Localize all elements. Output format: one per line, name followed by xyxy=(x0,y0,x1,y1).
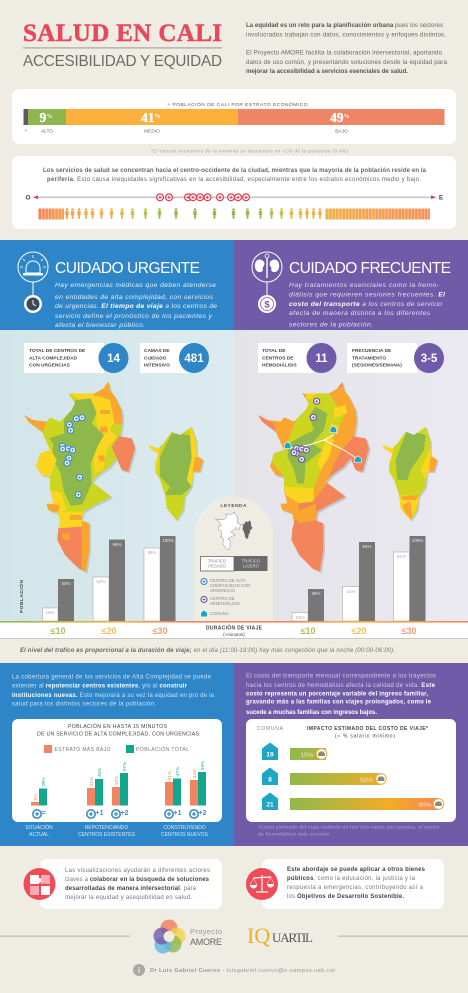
panel: population by economic stratum xyxy=(12,89,456,144)
panel text: Los servicios de salud se concentran hacia el centro-occidente de la ciudad, mientras que la mayoría de la población reside en la xyxy=(43,168,427,174)
cost chart title: (≈ % salario mínimo) xyxy=(335,734,395,740)
scenario icons: +1 xyxy=(96,810,104,817)
duration labels: ≤20 xyxy=(102,626,116,636)
bar chart: frequent care xyxy=(292,536,426,621)
comuna houses: 8 xyxy=(268,776,272,784)
stat: intensive care beds xyxy=(140,343,209,373)
logo: IQuartil: IQ xyxy=(247,923,270,948)
heading: CUIDADO URGENTE xyxy=(55,260,200,277)
legend items xyxy=(201,578,250,617)
logo: Proyecto AMORE xyxy=(154,920,222,954)
icon: puzzle xyxy=(24,868,56,900)
chart values: 32% xyxy=(114,776,119,785)
description: diálisis que requieren sesiones frecuentes. El xyxy=(289,292,445,298)
stat: treatment frequency: (SESIONES/SEMANA) xyxy=(352,362,402,368)
duration labels: ≤30 xyxy=(402,626,416,636)
scenario icons: +2 xyxy=(120,810,129,817)
cost bars: 90% xyxy=(418,802,432,809)
chart title: POBLACIÓN EN HASTA 15 MINUTOS xyxy=(68,723,168,730)
axis west to east with service markers: E xyxy=(439,194,444,202)
comuna houses: 21 xyxy=(266,802,274,808)
bar chart: urgent care xyxy=(42,536,176,621)
map: urgent care heavy traffic xyxy=(20,380,137,573)
author contact xyxy=(133,964,335,976)
stat: urgent care centres: TOTAL DE CENTROS DE xyxy=(29,348,86,354)
bar chart: urgent care: 100% xyxy=(162,538,174,543)
bar chart: frequent care: 10% xyxy=(295,615,305,620)
legend traffic key: LIGERO xyxy=(243,564,260,568)
duration labels xyxy=(51,626,416,636)
stat: intensive care beds: INTENSIVO xyxy=(144,362,170,368)
panel: frequent care map background xyxy=(234,330,468,622)
bar chart: frequent care: 41% xyxy=(346,589,356,594)
coverage text: extender al repotenciar centros existentes, y/o al construir xyxy=(12,684,188,690)
description: afecta de manera distinta a los diferentes xyxy=(289,310,431,317)
stat: intensive care beds: CUIDADO xyxy=(144,356,167,362)
transport text: sucede a muchas familias con ingresos bajos. xyxy=(246,710,377,716)
chart values: 6% xyxy=(33,793,38,800)
panel: east-west distribution xyxy=(12,156,456,229)
stat: urgent care centres xyxy=(24,343,128,373)
bar chart: frequent care: 100% xyxy=(412,538,423,543)
icon: kidneys and money xyxy=(252,252,282,313)
stat: urgent care centres: ALTA COMPLEJIDAD xyxy=(29,356,78,362)
stacked bar: % xyxy=(46,114,52,120)
duration labels: ≤20 xyxy=(352,626,366,636)
legend items: HEMODIÁLISIS xyxy=(210,601,240,606)
card text xyxy=(65,868,210,901)
chart title xyxy=(37,723,200,738)
transport text xyxy=(246,674,436,716)
legend traffic key xyxy=(200,556,268,571)
description: Hay tratamientos esenciales como la hemo- xyxy=(289,282,440,289)
duration labels: ≤30 xyxy=(153,626,167,636)
stat: treatment frequency: 3-5 xyxy=(421,353,438,365)
legend items: URGENCIAS xyxy=(210,588,235,593)
traffic note: El nivel del trafico es proporcional a la duración de viaje; en el día (11:00-19:00) hay más congestión que la noche (00:00-06:00). xyxy=(20,648,395,654)
card text: Las visualizaciones ayudarán a diferentes actores xyxy=(65,868,210,874)
card text: desarrolladas de manera intersectorial, para xyxy=(65,886,197,892)
logo: Proyecto AMORE: Proyecto xyxy=(190,927,222,936)
cost chart title: IMPACTO ESTIMADO DEL COSTO DE VIAJE* xyxy=(307,726,428,732)
description xyxy=(55,282,217,329)
stacked bar: 9 xyxy=(40,110,46,125)
bar chart: urgent care: 16% xyxy=(45,610,55,615)
card text: claves a colaborar en la búsqueda de soluciones xyxy=(65,877,210,883)
scenario icons: +1 xyxy=(174,810,182,817)
scenario icons: +2 xyxy=(198,810,207,817)
axis label: population: POBLACIÓN xyxy=(17,579,25,613)
panel: urgent care map background xyxy=(0,330,234,622)
map: urgent care light traffic xyxy=(147,423,205,522)
intro text: El Proyecto AMORE facilita la colaboración intersectorial, aportando xyxy=(246,50,443,56)
axis west to east with service markers: O xyxy=(25,194,31,202)
chart values xyxy=(33,761,205,800)
chart values: 57% xyxy=(122,762,127,771)
title block: SALUD EN CALI xyxy=(23,20,222,47)
stat: hemodialysis centres: TOTAL DE xyxy=(262,348,286,354)
cost card xyxy=(246,719,456,822)
scenario labels: REPOTENCIANDO xyxy=(85,825,128,831)
chart card xyxy=(12,719,222,822)
stat: urgent care centres: 14 xyxy=(107,353,120,365)
description: servicio define el pronóstico de los pacientes y xyxy=(55,313,213,320)
cost chart title xyxy=(307,726,428,740)
stat: hemodialysis centres: 11 xyxy=(315,353,328,365)
chart bars xyxy=(31,780,198,806)
legend xyxy=(194,496,273,622)
chart legend: POBLACIÓN TOTAL xyxy=(136,746,189,753)
title block xyxy=(23,20,222,70)
icon: scales xyxy=(246,868,278,900)
description: sectores de la población. xyxy=(289,322,373,328)
card text: los Objetivos de Desarrollo Sostenible. xyxy=(287,894,404,900)
duration strip: (≈minutos) xyxy=(223,632,245,637)
description: afecta el bienestar público. xyxy=(55,322,145,329)
axis west to east with service markers xyxy=(25,194,444,202)
panel: population by economic stratum: ≈ POBLACIÓN DE CALI POR ESTRATO ECONÓMICO xyxy=(168,101,308,108)
bar chart: frequent care: 94% xyxy=(362,544,372,549)
heading: CUIDADO FRECUENTE xyxy=(289,260,451,277)
stat: intensive care beds: CAMAS DE xyxy=(144,348,170,354)
intro text: mejorar la accesibilidad a servicios esenciales de salud. xyxy=(246,68,408,75)
footnote: stratum: *El estrato económico de la vivienda se desconoce en <1% de la población (0.4%) xyxy=(151,148,348,154)
scenario icons xyxy=(33,810,207,818)
chart teal bars xyxy=(39,772,206,806)
icon: kidneys and money: $ xyxy=(264,300,270,310)
icon: siren and clock xyxy=(18,252,48,313)
bar chart: frequent care: 38% xyxy=(311,591,321,596)
chart values: 59% xyxy=(200,761,205,770)
cost bars: 15% xyxy=(300,752,314,759)
service pins xyxy=(59,415,85,498)
legend items: CENTRO DE xyxy=(210,596,235,601)
chart values: 31% xyxy=(89,777,94,786)
legend items: COMPLEJIDAD CON xyxy=(210,583,250,588)
chart values: 41% xyxy=(167,771,172,780)
chart title: DE UN SERVICIO DE ALTA COMPLEJIDAD, CON URGENCIAS xyxy=(37,732,200,738)
title block: ACCESIBILIDAD Y EQUIDAD xyxy=(23,53,222,70)
card text: públicos, como la educación, la justicia y la xyxy=(287,876,416,882)
legend title: LEYENDA xyxy=(220,503,247,509)
intro text: datos de uso común, y presentando soluciones desde la equidad para xyxy=(246,59,448,66)
panel: frequent care header xyxy=(234,240,468,330)
bar chart: urgent care: 52% xyxy=(96,579,106,584)
panel text: periferia. Esto causa inequidades significativas en la accesibilidad, especialmente entre los estratos económicos medio y bajo. xyxy=(47,177,421,183)
panel: coverage xyxy=(0,663,234,846)
coverage text: salud para los distintos sectores de la población. xyxy=(12,702,156,708)
map: frequent care light traffic xyxy=(381,423,439,522)
cost footnote xyxy=(258,824,439,836)
author contact: Dr Luis Gabriel Cuervo - luisgabriel.cuervo@e-campus.uab.cat xyxy=(150,968,335,974)
legend items: CENTRO DE ALTA xyxy=(210,578,246,583)
description xyxy=(289,282,445,328)
coverage text: instituciones nuevas. Esto mejorará a su vez la equidad en pro de la xyxy=(12,693,215,699)
panel: urgent care header xyxy=(0,240,234,330)
intro text: involucrados trabajan con datos, conocimientos y enfoques distintos. xyxy=(246,32,446,38)
stacked bar: 49 xyxy=(330,110,344,125)
stat: treatment frequency xyxy=(347,343,444,373)
description: en entidades de alta complejidad, con servicios xyxy=(55,294,214,301)
comuna houses: 19 xyxy=(266,752,274,758)
scenario labels: CENTROS NUEVOS xyxy=(161,832,209,838)
chart values: 46% xyxy=(97,768,102,777)
panel: transport cost xyxy=(234,663,468,846)
bar chart: urgent care: 96% xyxy=(112,542,122,547)
chart legend: ESTRATO MÁS BAJO xyxy=(54,746,111,753)
description: Hay emergencias médicas que deben atenderse xyxy=(55,282,216,289)
stat: treatment frequency: FRECUENCIA DE xyxy=(352,348,392,354)
stratum labels: ALTO xyxy=(41,128,53,134)
logo: Proyecto AMORE: AMORE xyxy=(190,937,222,947)
stacked bar: 41 xyxy=(141,110,154,125)
scenario labels xyxy=(25,824,209,838)
card text: respuesta a emergencias, contribuyendo así a xyxy=(287,885,424,891)
cost card: COMUNA xyxy=(257,726,284,732)
conclusion card: collaboration xyxy=(24,859,222,909)
stat: hemodialysis centres xyxy=(258,343,336,373)
comuna houses xyxy=(262,742,278,810)
service pins and comuna markers xyxy=(284,398,361,463)
description: costo del transporte a los centros de servicio xyxy=(289,301,442,308)
stratum labels xyxy=(25,128,348,134)
chart values: 29% xyxy=(41,777,46,786)
cost bars xyxy=(290,748,444,810)
card text xyxy=(287,867,426,900)
transport text: costo representa un porcentaje variable del ingreso familiar, xyxy=(246,692,428,698)
card text: mejorar la equidad y asequibilidad en salud. xyxy=(65,895,192,901)
stratum labels: * xyxy=(25,128,27,134)
scenario labels: CONSTRUYENDO xyxy=(163,825,206,831)
transport text: hacia los centros de hemodiálisis afecta la calidad de vida. Este xyxy=(246,683,436,689)
chart values: 44% xyxy=(192,769,197,778)
stat: hemodialysis centres: HEMODIÁLISIS xyxy=(262,362,297,368)
chart values: 47% xyxy=(175,767,180,776)
legend traffic key: PESADO xyxy=(208,564,226,568)
transport text: gravando más a las familias con viajes prolongados, como le xyxy=(246,700,432,706)
cost footnote: de hemodiálisis más cercano xyxy=(258,832,329,836)
logo: IQuartil: UARTIL xyxy=(272,930,313,945)
scenario labels: ACTUAL xyxy=(29,832,49,838)
stat: intensive care beds: 481 xyxy=(184,353,204,365)
population pictogram xyxy=(38,208,430,220)
duration strip xyxy=(0,621,468,639)
panel text xyxy=(43,168,427,183)
logo: IQuartil xyxy=(247,923,313,948)
scenario icons: = xyxy=(42,810,46,817)
stacked bar: % xyxy=(154,114,160,120)
card text: Este abordaje se puede aplicar a otros bienes xyxy=(287,867,426,873)
legend traffic key: TRÁFICO xyxy=(208,558,227,564)
stratum labels: BAJO xyxy=(335,128,348,134)
commute routes xyxy=(288,435,358,459)
stat: urgent care centres: CON URGENCIAS xyxy=(29,362,71,368)
intro text xyxy=(246,22,448,75)
legend mini maps xyxy=(215,512,252,550)
stratum labels: MEDIO xyxy=(144,128,160,134)
bar chart: urgent care: 86% xyxy=(147,550,157,555)
stacked bar xyxy=(24,109,444,125)
stacked bar: % xyxy=(344,114,350,120)
author contact: i xyxy=(138,966,140,975)
stat: treatment frequency: TRATAMIENTO xyxy=(352,356,386,362)
description: de urgencias. El tiempo de viaje a los centros de xyxy=(55,303,217,310)
bar chart: urgent care: 50% xyxy=(61,581,71,586)
duration strip: DURACIÓN DE VIAJE xyxy=(206,624,263,632)
legend items: COMUNA xyxy=(210,611,229,616)
duration labels: ≤10 xyxy=(301,626,315,636)
transport text: El costo del transporte mensual correspondiente a los trayectos xyxy=(246,674,436,680)
legend traffic key: TRÁFICO xyxy=(242,558,261,564)
map: frequent care heavy traffic xyxy=(254,380,371,573)
coverage text: La cobertura general de los servicios de Alta Complejidad se puede xyxy=(12,674,212,680)
scenario labels: SITUACIÓN xyxy=(25,824,53,831)
cost bars: 50% xyxy=(360,777,373,784)
coverage text xyxy=(12,674,215,708)
chart legend xyxy=(44,745,189,753)
scenario labels: CENTROS EXISTENTES xyxy=(78,832,136,838)
footer rules xyxy=(0,936,468,937)
stat: hemodialysis centres: CENTROS DE xyxy=(262,356,294,362)
duration labels: ≤10 xyxy=(51,626,65,636)
intro text: La equidad es un reto para la planificación urbana pues los sectores xyxy=(246,22,443,29)
bar chart: frequent care: 81% xyxy=(397,554,406,559)
cost footnote: *Costo estimado del viaje redondo en taxi tres veces por semana, al centro xyxy=(258,824,439,830)
conclusion card: other public goods xyxy=(246,859,444,909)
